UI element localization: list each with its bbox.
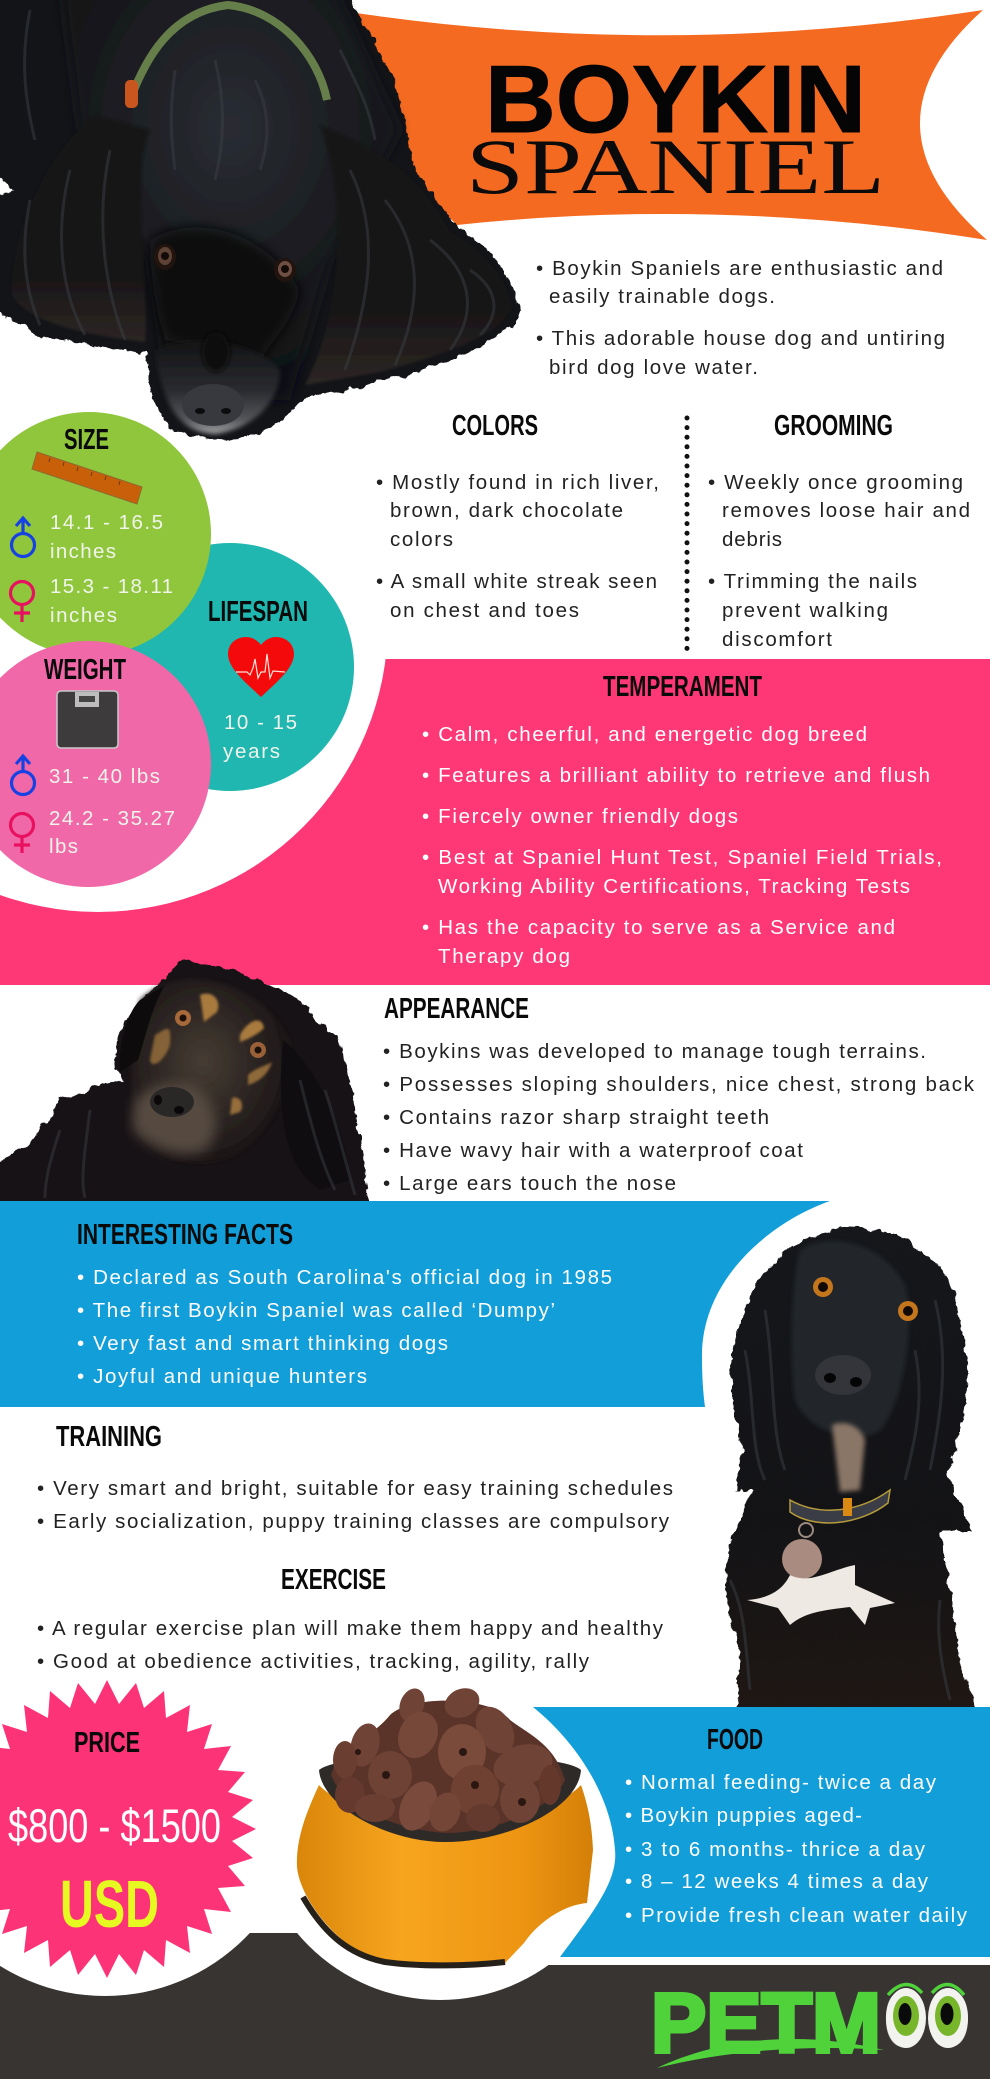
dog neck tan [832,1423,865,1492]
appearance text: • Boykins was developed to manage tough terrains. [383,1040,926,1063]
temperament text: • Fiercely owner friendly dogs [422,805,738,828]
icon: male symbol [12,518,34,556]
colors column: colors [390,528,453,551]
colors column: COLORS [452,410,538,442]
bowl rim [319,1755,581,1842]
weight bubble: 31 - 40 lbs [49,765,160,788]
interesting facts blue panel: • Joyful and unique hunters [77,1365,367,1388]
price starburst: $800 - $1500 [8,1799,221,1852]
weight bubble: 24.2 - 35.27 [49,807,175,830]
weight bubble [0,641,211,887]
temperament text: • Features a brilliant ability to retrieve and flush [422,764,930,787]
icon: female symbol [10,582,34,622]
grooming column: debris [722,528,782,551]
temperament text: • Has the capacity to serve as a Service and [422,916,895,939]
temperament text: TEMPERAMENT [603,671,762,703]
white circle behind price [0,1600,303,1996]
icon: ruler [32,452,142,504]
grooming column: • Weekly once grooming [708,471,963,494]
bowl body [297,1785,593,1965]
lifespan bubble: 10 - 15 [224,711,297,734]
food blue panel: • Boykin puppies aged- [625,1804,862,1827]
intro text: • Boykin Spaniels are enthusiastic and [536,257,943,280]
photo: black and tan dog [0,960,370,1215]
training text: TRAINING [56,1421,162,1453]
photo: sitting spaniel with collar [725,1228,980,1720]
price starburst [0,1680,256,1978]
interesting facts blue panel: • Declared as South Carolina's official dog in 1985 [77,1266,612,1289]
intro text: easily trainable dogs. [549,285,775,308]
food blue panel: FOOD [707,1724,763,1756]
dog nose [150,1087,194,1117]
icon: female symbol [10,814,34,853]
lifespan bubble: LIFESPAN [208,596,308,628]
photo: black spaniel lying down [0,0,520,439]
intro text [536,257,945,379]
interesting facts blue panel: • Very fast and smart thinking dogs [77,1332,448,1355]
title line: Boykin: BOYKIN [485,46,866,153]
size bubble: inches [50,540,116,563]
food blue panel: • 8 – 12 weeks 4 times a day [625,1870,929,1893]
size bubble: 14.1 - 16.5 [50,511,163,534]
weight bubble: WEIGHT [44,654,126,686]
logo: PetMoo [651,1974,970,2070]
illustration: orange bowl of kibble [297,1683,593,1965]
price starburst: USD [60,1867,159,1942]
icon: male symbol [12,756,34,794]
interesting facts blue panel [0,1201,830,1407]
grooming column: • Trimming the nails [708,570,917,593]
dark footer band [0,1933,990,2079]
exercise text: • A regular exercise plan will make them happy and healthy [37,1617,664,1640]
logo wordmark: PETM [651,1976,881,2070]
temperament pink panel [0,659,990,985]
dog eyes [175,1010,266,1058]
training text: • Very smart and bright, suitable for easy training schedules [37,1477,673,1500]
grooming column: discomfort [722,628,832,651]
temperament text: • Calm, cheerful, and energetic dog breed [422,723,867,746]
intro text: bird dog love water. [549,356,758,379]
white circle behind bowl [254,1628,626,2000]
appearance text: • Large ears touch the nose [383,1172,676,1195]
colors column: brown, dark chocolate [390,499,623,522]
icon: heart with pulse [228,637,294,697]
grooming column [708,410,970,651]
exercise text: • Good at obedience activities, tracking, agility, rally [37,1650,590,1673]
title line: Spaniel: SPANIEL [466,123,885,210]
white circle behind stat bubbles [0,332,388,912]
size bubble: 15.3 - 18.11 [50,575,173,598]
training text: • Early socialization, puppy training classes are compulsory [37,1510,670,1533]
logo swoosh [657,2039,884,2068]
exercise text: EXERCISE [281,1564,386,1596]
appearance text: • Contains razor sharp straight teeth [383,1106,769,1129]
dotted divider [684,418,690,650]
dog eyes [813,1277,918,1321]
price starburst: PRICE [74,1727,140,1759]
colors column: on chest and toes [390,599,579,622]
colors column [376,410,659,622]
appearance text [383,993,975,1195]
lifespan bubble [106,543,354,791]
temperament text: Therapy dog [438,945,570,968]
temperament text: • Best at Spaniel Hunt Test, Spaniel Field Trials, [422,846,942,869]
orange title banner [343,10,987,240]
appearance text: • Have wavy hair with a waterproof coat [383,1139,803,1162]
size bubble: inches [50,604,117,627]
temperament text [422,671,942,968]
dog muzzle [155,341,280,434]
dog collar and tag [782,1490,890,1579]
weight bubble: lbs [49,835,78,858]
dog collar [130,5,327,100]
icon: bathroom scale [57,691,118,748]
tan markings [150,994,272,1115]
colors column: • Mostly found in rich liver, [376,471,659,494]
lifespan bubble: years [223,740,280,763]
temperament text: Working Ability Certifications, Tracking Tests [438,875,910,898]
intro text: • This adorable house dog and untiring [536,327,945,350]
exercise text [37,1564,664,1673]
colors column: • A small white streak seen [376,570,657,593]
interesting facts blue panel: INTERESTING FACTS [77,1219,293,1251]
size bubble: SIZE [64,424,109,456]
grooming column: removes loose hair and [722,499,970,522]
food blue panel: • Normal feeding- twice a day [625,1771,937,1794]
title [466,46,885,210]
kibble holes [355,1748,526,1806]
dog eyes [154,244,296,282]
appearance text: • Possesses sloping shoulders, nice chest, strong back [383,1073,975,1096]
food blue panel: • Provide fresh clean water daily [625,1904,968,1927]
grooming column: GROOMING [774,410,893,442]
dog muzzle [133,1083,216,1154]
food blue panel [533,1707,990,1957]
dog nose [182,332,244,426]
size bubble [0,412,211,656]
kibble pile [331,1683,565,1837]
interesting facts blue panel: • The first Boykin Spaniel was called ‘Dumpy’ [77,1299,555,1322]
appearance text: APPEARANCE [384,993,529,1025]
food blue panel: • 3 to 6 months- thrice a day [625,1838,926,1861]
bowl base band [303,1897,505,1965]
dog white chest [747,1565,895,1625]
grooming column: prevent walking [722,599,888,622]
dog nose [815,1355,871,1395]
training text [37,1421,673,1533]
